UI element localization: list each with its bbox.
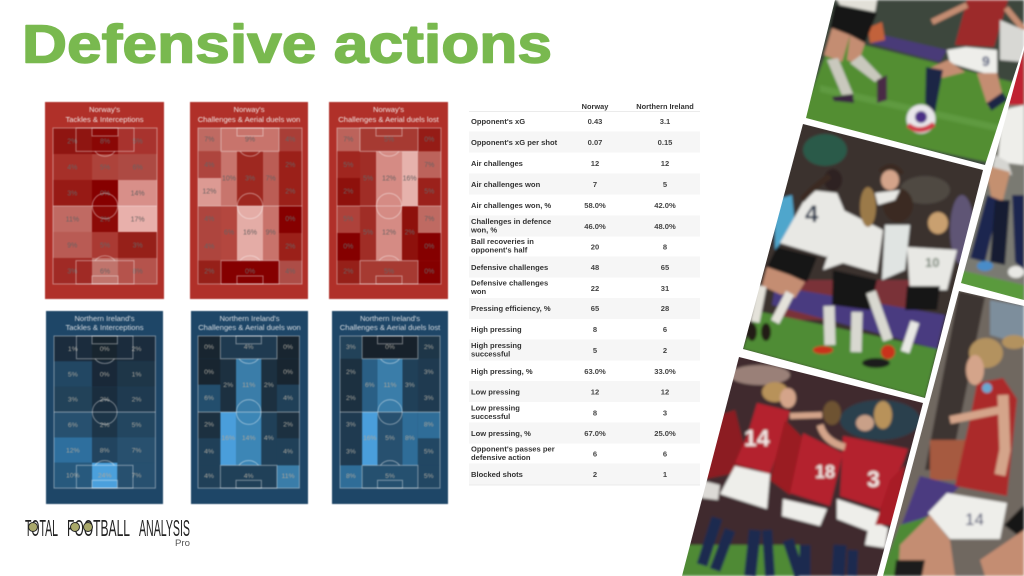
heatmap pitch: 7%	[424, 162, 434, 169]
heatmap pitch: 5%	[133, 138, 143, 145]
heatmap pitch: 7%	[204, 136, 214, 143]
heatmap pitch: 8%	[100, 447, 110, 454]
panel heading: Northern Ireland's	[360, 314, 420, 323]
heatmap pitch: 12%	[382, 175, 396, 182]
panel: Norway tackles and interceptions	[45, 102, 164, 299]
heatmap pitch: 0%	[385, 344, 395, 351]
heatmap pitch: 2%	[204, 269, 214, 276]
heatmap pitch: 4%	[244, 344, 254, 351]
heatmap pitch: 5%	[100, 242, 110, 249]
heatmap pitch: 5%	[385, 435, 395, 442]
statistics table: 65	[591, 304, 600, 313]
statistics table: 5	[663, 180, 668, 189]
heatmap pitch: 24%	[98, 473, 112, 480]
statistics table: Air challenges	[471, 159, 523, 168]
photo: Norway players celebrating: 14	[744, 425, 770, 451]
heatmap pitch: 5%	[343, 216, 353, 223]
statistics table: Pressing efficiency, %	[471, 304, 551, 313]
heatmap pitch: 0%	[100, 190, 110, 197]
photo: Norway player number 14	[880, 288, 1024, 576]
heatmap pitch: 1%	[132, 371, 141, 378]
heatmap pitch: 6%	[204, 395, 214, 402]
heatmap pitch	[198, 128, 302, 284]
heatmap pitch: 0%	[100, 346, 110, 353]
heatmap pitch: 4%	[264, 435, 274, 442]
text: ANALYSIS	[139, 515, 190, 541]
statistics table: Northern Ireland	[636, 102, 694, 111]
statistics table: 12	[591, 159, 599, 168]
statistics table: 67.0%	[584, 429, 606, 438]
heatmap pitch: 12%	[66, 447, 80, 454]
panel: Norway challenges and aerial duels won	[190, 102, 308, 299]
statistics table: 12	[661, 388, 669, 396]
heatmap pitch: 2%	[343, 189, 353, 196]
heatmap pitch: 16%	[221, 435, 235, 442]
statistics table: successful	[471, 412, 510, 421]
photo: legs and ball, top	[800, 0, 1024, 170]
statistics table: 2	[593, 470, 597, 479]
statistics table: 8	[593, 325, 597, 334]
heatmap pitch: 11%	[281, 473, 295, 480]
panel heading	[65, 314, 144, 332]
statistics table: 25.0%	[654, 429, 676, 438]
statistics table: 12	[591, 388, 599, 396]
statistics table: 22	[591, 284, 599, 293]
statistics table: 0.43	[588, 117, 602, 126]
statistics table: 3	[663, 408, 667, 418]
heatmap pitch: 2%	[285, 189, 295, 196]
heatmap pitch: 2%	[285, 244, 295, 251]
heatmap pitch: 6%	[224, 230, 234, 237]
statistics table	[469, 102, 700, 485]
heatmap pitch: 5%	[384, 269, 394, 276]
statistics table: 31	[661, 284, 670, 293]
panel heading: Northern Ireland's	[74, 314, 135, 323]
heatmap pitch	[198, 336, 299, 488]
heatmap pitch: 0%	[204, 344, 214, 351]
heatmap pitch: 3%	[245, 175, 255, 182]
statistics table: 6	[663, 325, 667, 334]
statistics table: 12	[661, 159, 669, 168]
heatmap pitch: 8%	[424, 422, 434, 429]
heatmap pitch: 3%	[346, 422, 356, 429]
heatmap pitch	[53, 128, 157, 284]
heatmap pitch	[54, 336, 155, 488]
heatmap pitch: 3%	[133, 242, 143, 249]
statistics table: Opponent's xG per shot	[471, 138, 558, 147]
logo: Total Football Analysis Pro: TOTAL	[25, 515, 58, 541]
heatmap pitch: 1%	[68, 346, 78, 353]
heatmap pitch: 2%	[223, 382, 233, 389]
heatmap pitch: 3%	[68, 397, 78, 404]
panel heading: Challenges & Aerial duels won	[198, 323, 301, 332]
heatmap pitch: 2%	[346, 395, 356, 402]
panel heading: Northern Ireland's	[219, 314, 280, 323]
heatmap pitch: 17%	[131, 216, 145, 223]
photo: Northern Ireland players celebrating: 10	[925, 255, 939, 270]
heatmap pitch: 5%	[343, 162, 353, 169]
statistics table: 0.07	[588, 138, 602, 147]
photo: Norway players celebrating: 18	[815, 462, 835, 482]
heatmap pitch: 2%	[132, 397, 141, 404]
heatmap pitch: 4%	[204, 216, 214, 223]
statistics table: won	[470, 287, 487, 296]
heatmap pitch: 5%	[424, 449, 434, 456]
statistics table: 8	[663, 242, 667, 252]
heatmap pitch: 4%	[285, 136, 295, 143]
panel heading	[338, 105, 440, 124]
photo: Norway players celebrating	[680, 350, 930, 576]
heatmap pitch: 4%	[283, 449, 293, 456]
statistics table: Ball recoveries in	[471, 237, 534, 246]
heatmap pitch: 4%	[283, 395, 293, 402]
statistics table: Blocked shots	[471, 470, 523, 479]
heatmap pitch: 10%	[66, 473, 80, 480]
heatmap pitch: 0%	[424, 136, 434, 143]
statistics table: Norway	[582, 102, 609, 111]
heatmap pitch	[337, 128, 441, 284]
heatmap pitch: 12%	[382, 230, 396, 237]
statistics table: 7	[593, 180, 597, 189]
heatmap pitch: 9%	[67, 242, 77, 249]
statistics table: Low pressing	[471, 404, 520, 412]
heatmap pitch: 4%	[204, 449, 214, 456]
heatmap pitch: 2%	[67, 138, 77, 145]
heatmap pitch: 4%	[204, 244, 214, 251]
heatmap pitch: 4%	[67, 164, 77, 171]
statistics table: Low pressing	[471, 388, 520, 396]
heatmap pitch: 3%	[346, 449, 356, 456]
panel heading	[340, 314, 441, 332]
title: Defensive actions	[22, 14, 552, 74]
heatmap pitch: 0%	[424, 269, 434, 276]
panel heading	[198, 314, 301, 332]
heatmap pitch: 5%	[424, 189, 434, 196]
statistics table: 0.15	[658, 138, 673, 147]
heatmap pitch: 2%	[264, 382, 274, 389]
statistics table: successful	[471, 350, 510, 358]
panel: Northern Ireland challenges and aerial duels won	[191, 311, 308, 504]
heatmap pitch: 2%	[343, 269, 353, 276]
statistics table: 33.0%	[654, 367, 676, 376]
statistics table: High pressing	[471, 325, 522, 334]
heatmap pitch: 5%	[384, 136, 394, 143]
statistics table: 8	[593, 408, 597, 418]
heatmap pitch: 0%	[245, 269, 255, 276]
statistics table: Challenges in defence	[471, 217, 551, 226]
heatmap pitch: 0%	[285, 216, 295, 223]
statistics table: 5	[593, 346, 598, 355]
panel: Northern Ireland challenges and aerial duels lost	[332, 311, 448, 504]
photo: legs and ball, top: 9	[982, 53, 990, 69]
panel heading	[198, 105, 300, 124]
statistics table: 48.0%	[654, 222, 676, 231]
heatmap pitch: 4%	[204, 162, 214, 169]
heatmap pitch: 5%	[132, 422, 141, 429]
heatmap pitch: 7%	[132, 447, 141, 454]
panel heading: Norway's	[89, 105, 120, 114]
panel heading: Challenges & Aerial duels lost	[340, 323, 441, 332]
statistics table: 28	[661, 304, 669, 313]
statistics table: 46.0%	[584, 222, 606, 231]
heatmap pitch: 7%	[343, 136, 353, 143]
heatmap pitch: 3%	[67, 190, 77, 197]
statistics table: 6	[593, 450, 597, 458]
heatmap pitch: 11%	[384, 382, 396, 389]
heatmap pitch: 7%	[424, 216, 434, 223]
statistics table: Opponent's xG	[471, 117, 525, 126]
heatmap pitch: 12%	[202, 189, 216, 196]
heatmap pitch: 11%	[66, 216, 79, 223]
heatmap pitch: 6%	[68, 422, 78, 429]
heatmap pitch: 0%	[424, 244, 434, 251]
panel: Norway challenges and aerial duels lost	[329, 102, 448, 299]
heatmap pitch: 6%	[133, 164, 143, 171]
heatmap pitch: 0%	[283, 344, 293, 351]
heatmap pitch: 2%	[424, 344, 434, 351]
heatmap pitch: 5%	[424, 473, 434, 480]
panel heading: Challenges & Aerial duels lost	[338, 115, 440, 124]
panel heading: Tackles & Interceptions	[65, 323, 144, 332]
statistics table: won, %	[470, 226, 497, 234]
heatmap pitch: 6%	[100, 268, 110, 275]
statistics table: 2	[663, 346, 667, 355]
heatmap pitch: 16%	[243, 230, 257, 237]
heatmap pitch: 9%	[245, 136, 255, 143]
panel heading: Tackles & Interceptions	[65, 115, 144, 124]
panel heading	[65, 105, 144, 124]
statistics table: Opponent's passes per	[471, 444, 555, 454]
photo: Norway player number 14: 14	[965, 510, 984, 529]
heatmap pitch: 4%	[285, 269, 295, 276]
heatmap pitch: 8%	[346, 473, 356, 480]
heatmap pitch	[340, 336, 440, 488]
panel: Northern Ireland tackles and interceptions	[46, 311, 163, 504]
heatmap pitch: 2%	[346, 369, 356, 376]
heatmap pitch: 2%	[100, 397, 110, 404]
heatmap pitch: 0%	[343, 244, 353, 251]
heatmap pitch: 10%	[222, 175, 236, 182]
statistics table: 6	[663, 450, 667, 458]
photo: Northern Ireland players celebrating	[740, 120, 990, 402]
heatmap pitch: 0%	[100, 371, 110, 378]
statistics table: 48	[591, 263, 599, 272]
heatmap pitch: 6%	[365, 382, 375, 389]
panel heading: Norway's	[373, 105, 404, 114]
statistics table: Low pressing, %	[471, 429, 531, 438]
heatmap pitch: 4%	[244, 473, 254, 480]
logo: Total Football Analysis Pro: FOOTBALL	[67, 515, 130, 541]
heatmap pitch: 2%	[100, 216, 110, 223]
heatmap pitch: 0%	[204, 369, 214, 376]
logo: Total Football Analysis Pro	[25, 515, 190, 549]
heatmap pitch: 16%	[363, 435, 377, 442]
heatmap pitch: 14%	[131, 190, 145, 197]
heatmap pitch: 0%	[283, 369, 293, 376]
statistics table: 1	[663, 470, 668, 479]
heatmap pitch: 5%	[68, 371, 78, 378]
panel heading: Challenges & Aerial duels won	[198, 115, 300, 124]
panel heading: Norway's	[234, 105, 265, 114]
statistics table: 42.0%	[654, 201, 676, 210]
photo: legs at right edge	[961, 50, 1024, 300]
heatmap pitch: 9%	[266, 230, 276, 237]
statistics table: High pressing, %	[471, 367, 533, 376]
heatmap pitch: 8%	[133, 268, 143, 275]
statistics table: High pressing	[471, 341, 522, 350]
heatmap pitch: 16%	[403, 175, 417, 182]
heatmap pitch: 4%	[204, 473, 214, 480]
heatmap pitch: 5%	[363, 230, 373, 237]
photo: Northern Ireland players celebrating: 4	[805, 201, 819, 228]
statistics table: defensive action	[471, 453, 531, 462]
heatmap pitch: 3%	[405, 382, 415, 389]
logo: Total Football Analysis Pro: Pro	[175, 538, 190, 549]
heatmap pitch: 7%	[266, 175, 276, 182]
heatmap pitch: 7%	[132, 473, 141, 480]
heatmap pitch: 11%	[242, 382, 255, 389]
statistics table: 63.0%	[584, 367, 606, 376]
statistics table: Air challenges won, %	[471, 201, 551, 210]
statistics table: 65	[661, 263, 670, 272]
statistics table: opponent's half	[471, 246, 528, 254]
heatmap pitch: 5%	[100, 164, 110, 171]
heatmap pitch: 5%	[363, 175, 373, 182]
heatmap pitch: 8%	[405, 435, 415, 442]
statistics table: Defensive challenges	[471, 263, 548, 272]
heatmap pitch: 3%	[346, 344, 356, 351]
heatmap pitch: 2%	[405, 230, 415, 237]
heatmap pitch: 5%	[385, 473, 395, 480]
heatmap pitch: 3%	[67, 268, 77, 275]
heatmap pitch: 8%	[100, 138, 110, 145]
heatmap pitch: 14%	[242, 435, 256, 442]
statistics table: 20	[591, 242, 599, 252]
heatmap pitch: 2%	[204, 422, 214, 429]
heatmap pitch: 3%	[424, 395, 434, 402]
statistics table: Defensive challenges	[471, 278, 548, 288]
statistics table: 58.0%	[584, 201, 606, 210]
statistics table: 3.1	[660, 117, 671, 126]
heatmap pitch: 2%	[283, 422, 293, 429]
heatmap pitch: 3%	[424, 369, 434, 376]
heatmap pitch: 2%	[132, 346, 141, 353]
heatmap pitch: 2%	[285, 162, 295, 169]
photo: Norway players celebrating: 3	[867, 466, 880, 492]
statistics table: Air challenges won	[471, 180, 541, 189]
heatmap pitch: 2%	[100, 422, 110, 429]
